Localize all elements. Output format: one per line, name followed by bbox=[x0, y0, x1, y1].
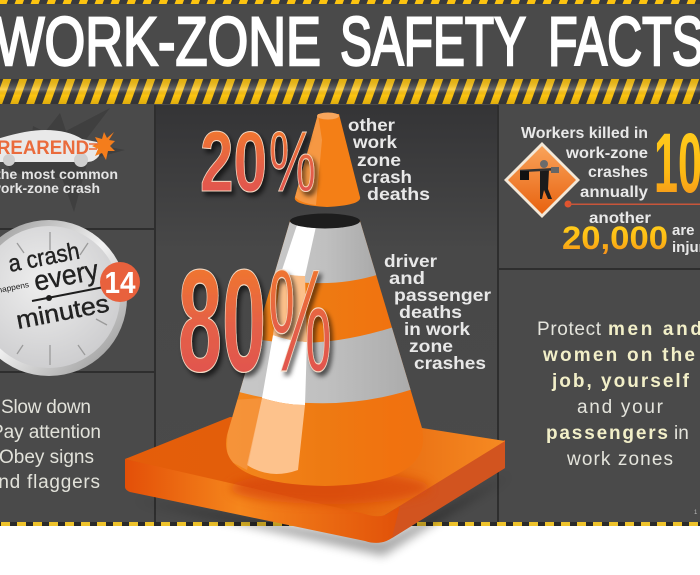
text: safety tips bbox=[0, 397, 101, 493]
cone opening bbox=[290, 214, 360, 228]
text: workers killed: annually bbox=[580, 184, 648, 201]
title: SAFETY bbox=[340, 3, 526, 80]
text: workers killed: work-zone bbox=[565, 145, 648, 162]
title: WORK-ZONE bbox=[0, 3, 321, 80]
stat: 20 percent: 20 bbox=[200, 115, 267, 210]
text: driver and passenger deaths: driver bbox=[384, 251, 437, 271]
text: driver and passenger deaths: zone bbox=[409, 336, 453, 356]
text: driver and passenger deaths: and bbox=[389, 268, 425, 288]
cone body bbox=[226, 221, 422, 486]
cone shadow bbox=[135, 475, 510, 556]
stat: 20,000: 20,000 bbox=[562, 220, 668, 256]
text: another: another bbox=[589, 210, 651, 227]
large cone bbox=[125, 214, 510, 556]
text: protect message: in bbox=[674, 423, 689, 444]
text: other deaths: zone bbox=[357, 150, 401, 170]
text: other deaths: crash bbox=[362, 167, 412, 187]
text: driver and passenger deaths: in work bbox=[404, 319, 470, 339]
text: driver and passenger deaths: deaths bbox=[399, 302, 462, 322]
text: most common crash bbox=[0, 167, 118, 196]
badge: 14: 14 bbox=[104, 265, 136, 300]
text: protect message: men and bbox=[608, 319, 700, 340]
text: protect message: work zones bbox=[566, 449, 673, 470]
divider line with dot bbox=[564, 200, 700, 208]
text: workers killed: crashes bbox=[588, 164, 648, 181]
icon: clock bbox=[0, 220, 127, 376]
text: driver and passenger deaths: passenger bbox=[394, 285, 491, 305]
text: protect message bbox=[537, 319, 700, 470]
stat: 20 percent: % bbox=[269, 115, 316, 210]
panel dividers bbox=[0, 105, 700, 522]
top hazard stripe bbox=[0, 0, 700, 4]
text: safety tips: Obey signs bbox=[0, 447, 94, 468]
panel: center bbox=[156, 105, 497, 522]
clock text bbox=[0, 238, 111, 335]
text: driver and passenger deaths: crashes bbox=[414, 353, 486, 373]
icon: crash starburst and car bbox=[0, 108, 125, 212]
title bbox=[0, 3, 700, 80]
clock text: a crash bbox=[6, 238, 82, 278]
cone base bbox=[125, 417, 505, 543]
text: % bbox=[268, 239, 332, 402]
text: protect message: women on the bbox=[542, 345, 695, 366]
text: other deaths: deaths bbox=[367, 184, 430, 204]
icon: flagger sign bbox=[504, 142, 580, 218]
text: protect message: passengers bbox=[546, 423, 668, 444]
small cone bbox=[295, 112, 360, 207]
text: protect message: job, yourself bbox=[551, 371, 690, 392]
clock text: minutes bbox=[14, 289, 111, 335]
text: protect message: and your bbox=[577, 397, 664, 418]
text: are injured bbox=[672, 222, 700, 256]
footnote mark: 1 bbox=[694, 510, 698, 516]
text: driver and passenger deaths bbox=[384, 251, 491, 373]
hazard stripe band bbox=[0, 79, 700, 104]
text: safety tips: Slow down bbox=[1, 397, 91, 418]
stat: 80 percent: 80 bbox=[178, 239, 266, 402]
clock text: every bbox=[31, 254, 101, 297]
bottom hazard stripe bbox=[0, 522, 700, 526]
text: workers killed: Workers killed in bbox=[521, 125, 648, 142]
text: other deaths bbox=[348, 115, 430, 204]
text: protect message: Protect bbox=[537, 319, 602, 340]
text: other deaths: work bbox=[352, 132, 397, 152]
text: workers killed bbox=[521, 125, 648, 201]
text: other deaths: other bbox=[348, 115, 395, 135]
text: are injured: are bbox=[672, 222, 695, 239]
